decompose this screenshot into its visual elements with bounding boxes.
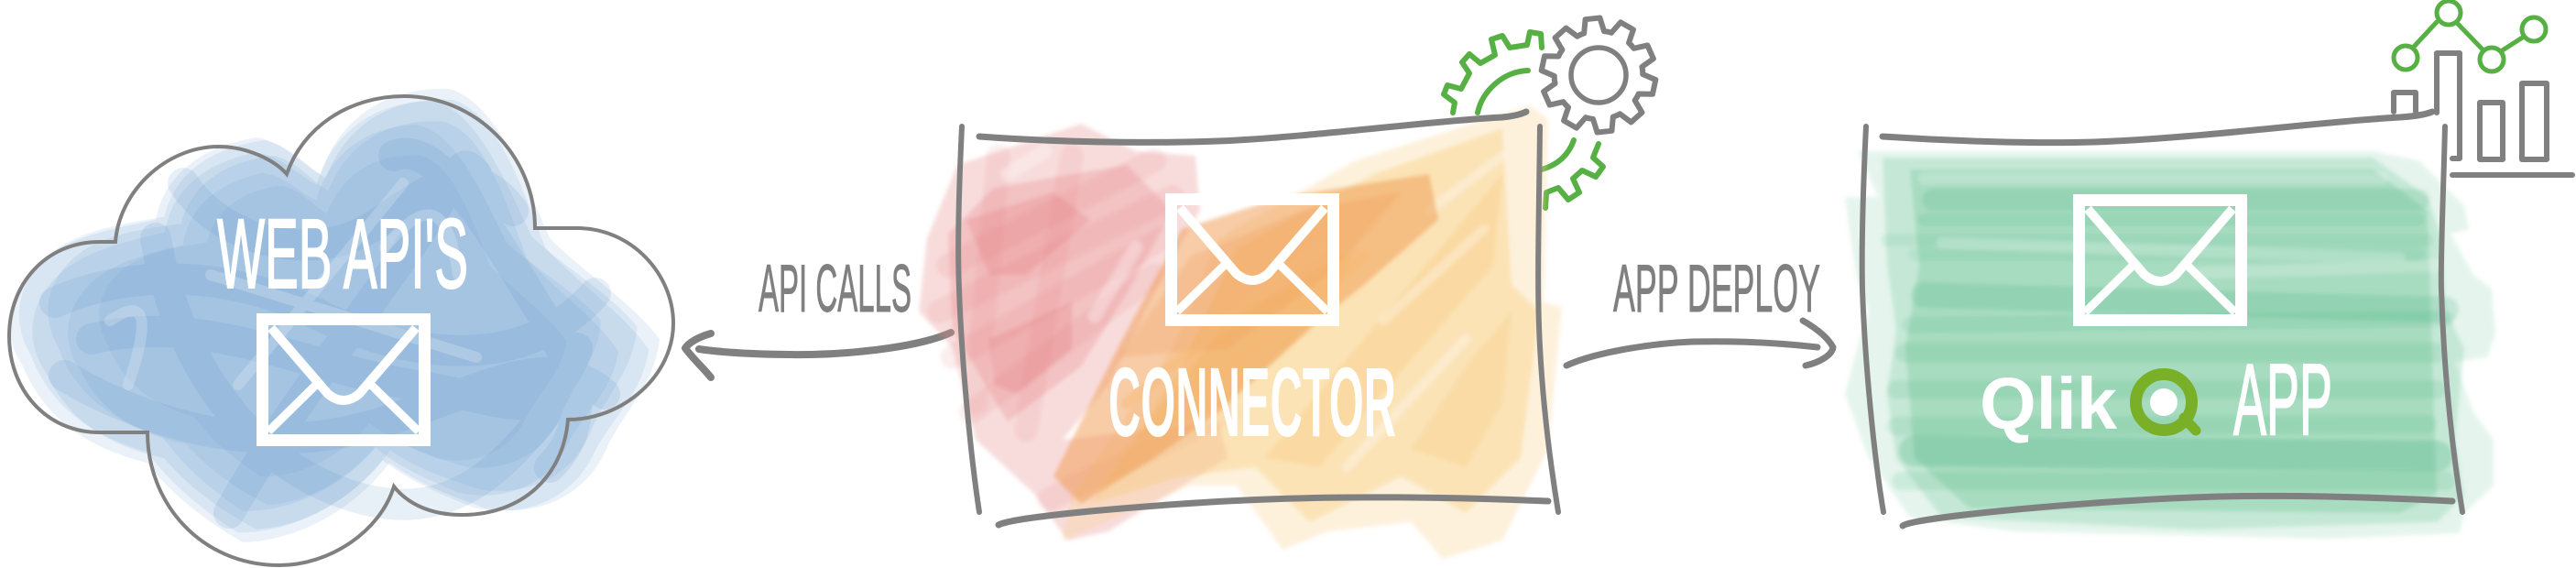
icon: envelope web bbox=[262, 319, 425, 440]
panel: qlik app: APP bbox=[2233, 344, 2332, 456]
heading: web apis: WEB API'S bbox=[217, 198, 468, 309]
arrow: api calls bbox=[685, 333, 951, 377]
bars bbox=[2394, 53, 2572, 175]
red paint bbox=[919, 124, 1228, 541]
blue paint wash bbox=[10, 85, 660, 547]
green paint bbox=[1845, 151, 2495, 539]
frame bbox=[1862, 112, 2462, 526]
icon: envelope connector bbox=[1171, 200, 1334, 321]
frame bbox=[958, 112, 1558, 525]
cloud outline bbox=[9, 96, 673, 565]
arrow: app deploy bbox=[1566, 321, 1833, 366]
line series bbox=[2394, 1, 2546, 71]
yellow paint bbox=[1063, 105, 1562, 559]
text: API CALLS bbox=[759, 252, 911, 326]
panel: connector bbox=[919, 105, 1562, 559]
green gear bbox=[1444, 32, 1603, 208]
icon: envelope app bbox=[2079, 200, 2241, 321]
icon: gears bbox=[1444, 17, 1657, 208]
text: APP DEPLOY bbox=[1613, 252, 1820, 326]
logo text: qlik: Qlik bbox=[1980, 363, 2118, 444]
orange paint bbox=[1053, 174, 1438, 504]
grey gear bbox=[1540, 17, 1657, 133]
panel: web apis cloud bbox=[9, 85, 673, 565]
panel: qlik app bbox=[1845, 112, 2495, 539]
panel: connector: CONNECTOR bbox=[1108, 346, 1396, 457]
icon: qlik logo mark bbox=[2136, 374, 2196, 431]
icon: bar and line chart bbox=[2394, 1, 2572, 175]
